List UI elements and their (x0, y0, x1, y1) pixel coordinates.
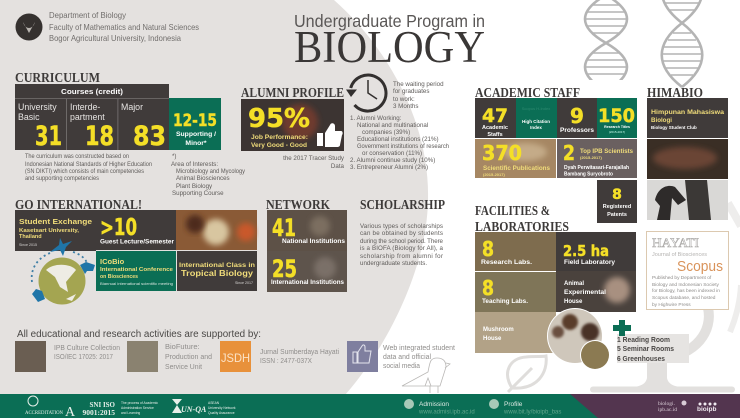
text: waiting period: 3 Months (393, 103, 418, 110)
heading: scholarship: SCHOLARSHIP (360, 197, 445, 212)
text: area of interests: *) (172, 153, 176, 160)
footer: accreditation: ACCREDITATION (25, 410, 63, 416)
text: area of interests: Microbiology and Mycology (176, 168, 246, 175)
heading: go international: GO INTERNATIONAL! (15, 197, 142, 212)
panel: academic staff grid: (2015-2017) (609, 130, 625, 134)
panel: go international grid: on Biosciences (100, 274, 138, 280)
icon: DNA helix right (662, 0, 702, 87)
panel: network: International Institutions (271, 279, 345, 286)
footer: accreditation: SNI ISO (90, 401, 116, 409)
panel: academic staff grid: Index (530, 125, 542, 130)
panel: academic staff grid: Academic (482, 125, 508, 131)
panel: courses table: Courses (credit) (61, 87, 124, 96)
panel: himabio club: Biologi (651, 117, 672, 124)
panel: facilities grid: Field Laboratory (564, 260, 616, 266)
panel: go international grid: International Class in (179, 263, 255, 269)
text: alumni breakdown: Government institutions of research (357, 143, 450, 150)
item: web integrated (347, 341, 455, 372)
header: department text: Bogor Agricultural University, Indonesia (49, 34, 181, 43)
header: department text: Faculty of Mathematics and Natural Sciences (49, 23, 199, 32)
item: IPB culture collection (15, 341, 120, 372)
panel: registered patents: Registered (603, 204, 631, 210)
photo: students in lab circle (547, 308, 610, 370)
panel: academic staff grid: Professors (560, 127, 594, 134)
text: area of interests: Area of Interests: (171, 161, 218, 168)
text: waiting period: to work: (393, 96, 415, 103)
panel: facilities grid: Mushroom (483, 327, 514, 333)
footer: social handles: ipb.ac.id (658, 407, 677, 413)
panel: facilities grid: 8 (482, 237, 494, 261)
panel: go international grid (15, 210, 257, 291)
text: waiting period: The waiting period (393, 81, 444, 88)
text: alumni breakdown: National and multinational (357, 122, 428, 129)
panel: go international grid: Thailand (19, 234, 42, 240)
panel: facilities grid: 8 (482, 276, 494, 300)
item: jurnal sumberdaya hayati (220, 341, 339, 372)
heading: himabio: HIMABIO (647, 85, 703, 100)
text: alumni breakdown (350, 115, 450, 171)
text: waiting period: for graduates (393, 88, 429, 95)
panel: hayati journal: HAYATI (652, 235, 699, 250)
panel: courses table: Major (121, 102, 143, 112)
text: alumni breakdown: 2. Alumni continue study (10%) (350, 157, 435, 164)
panel: go international grid: ICoBio (100, 257, 125, 266)
panel: supporting minor: Minor* (185, 140, 207, 147)
footer: admission link (404, 399, 475, 416)
item: IPB culture collection: ISO/IEC 17025: 2017 (54, 354, 113, 361)
panel: facilities grid: House (483, 336, 502, 342)
item: web integrated: social media (383, 363, 420, 370)
text: other facilities: 6 Greenhouses (617, 356, 665, 363)
panel: facilities grid: Animal (564, 281, 584, 287)
panel: supporting minor: 12-15 (173, 111, 217, 131)
panel: hayati journal (646, 232, 728, 310)
text: curriculum description: The curriculum was constructed based on (25, 153, 130, 160)
panel: courses table: partment (70, 112, 105, 122)
icon: green plus (613, 320, 631, 336)
panel: go international grid: >10 (100, 215, 137, 241)
text: scholarship description: undergraduate students. (360, 260, 427, 267)
icon: clock (346, 75, 386, 111)
panel: job performance: 95% (248, 104, 310, 134)
panel: hayati journal: Published by Department of (652, 275, 712, 281)
footer: accreditation: Quality Assurance (208, 411, 235, 415)
icon: university logo (16, 14, 42, 40)
text: alumni breakdown: or conservation (11%) (362, 150, 422, 157)
footer: accreditation: and Learning (121, 411, 140, 415)
panel: network: 25 (272, 255, 297, 283)
item: web integrated: data and official (383, 354, 431, 361)
panel: courses table: 18 (85, 121, 114, 152)
footer: admission link: Admission (419, 401, 449, 408)
icon: microscope watermark (593, 203, 740, 390)
panel: academic staff grid: Scopus H-Index (522, 106, 550, 111)
text: area of interests: Plant Biology (176, 183, 213, 190)
text: curriculum description: and supporting competencies (25, 175, 99, 182)
panel: go international grid: Since 2017 (235, 281, 253, 285)
text: tracer study note: the 2017 Tracer Study (283, 155, 345, 162)
footer: profile link (489, 399, 561, 416)
panel: courses table: 83 (133, 121, 166, 152)
panel: courses table: University (18, 102, 57, 112)
text: alumni breakdown: 3. Entrepreneur Alumni (2%) (350, 164, 428, 171)
panel: facilities grid: House (564, 299, 583, 305)
title: BIOLOGY (294, 22, 485, 72)
panel: hayati journal: Scopus database, and hosted (652, 295, 716, 301)
item: biofuture: BioFuture: (165, 342, 200, 351)
panel: academic staff grid: High Citation (522, 119, 550, 124)
footer: social handles: bioipb (697, 406, 717, 413)
footer: accreditation: UN-QA (181, 405, 207, 414)
panel: hayati journal: Scopus (677, 258, 723, 275)
heading: supported by: All educational and research activities are supported by: (17, 329, 261, 340)
panel: academic staff grid (475, 98, 637, 178)
panel: supporting minor: Supporting / (176, 131, 216, 138)
panel: job performance: Very Good - Good (251, 142, 307, 149)
text: scholarship description: is a BIOFA (Biology for All), a (360, 245, 444, 252)
panel: go international grid: Tropical Biology (181, 269, 254, 278)
panel: courses table (15, 84, 169, 152)
panel: network: 41 (272, 214, 296, 242)
panel: hayati journal: by Highwire Press (652, 302, 691, 308)
panel: go international grid: Student Exchange (19, 217, 92, 226)
title: Undergraduate Program in (294, 11, 485, 31)
item: biofuture: Production and (165, 352, 212, 361)
panel: go international grid: Since 2015 (19, 243, 37, 247)
panel: courses table: Interde- (70, 102, 100, 112)
panel: registered patents (597, 180, 637, 223)
footer: accreditation: A (65, 405, 76, 420)
text: tracer study note (283, 155, 345, 170)
heading: alumni profile: ALUMNI PROFILE (241, 85, 344, 100)
icon: globe with planes (32, 238, 95, 304)
heading: facilities and laboratories: LABORATORIES (475, 219, 569, 234)
panel: go international grid: International Conference (100, 267, 173, 273)
text: alumni breakdown: Educational institutions (21%) (357, 136, 439, 143)
panel: go international grid: Kasetsart University, (19, 228, 80, 234)
text: curriculum description: Indonesian National Standards of Higher Education (25, 161, 153, 168)
item: jurnal sumberdaya hayati: Jurnal Sumberdaya Hayati (260, 349, 339, 356)
footer: accreditation: The process of Academic (121, 401, 158, 405)
text: other facilities (617, 337, 674, 363)
text: scholarship description (360, 223, 444, 267)
heading: academic staff: ACADEMIC STAFF (475, 85, 580, 100)
text: waiting period (393, 81, 444, 110)
text: scholarship description: Various types of scholarships (360, 223, 443, 230)
icon: leaf watermark (508, 356, 546, 392)
item: biofuture: Service Unit (165, 362, 203, 371)
footer: admission link: www.admisi.ipb.ac.id (418, 410, 475, 416)
text: area of interests: Animal Biosciences (176, 175, 230, 182)
panel: courses table: Basic (18, 112, 40, 122)
panel: academic staff grid: Dyah Perwitasari-Farajallah (564, 165, 629, 171)
panel: hayati journal: for Biology, has been indexed in (652, 288, 720, 294)
panel: network (267, 210, 347, 292)
footer: profile link: Profile (504, 401, 523, 408)
panel: network: National Institutions (282, 238, 346, 245)
panel: academic staff grid: 370 (482, 141, 522, 165)
heading: facilities and laboratories: FACILITIES & (475, 203, 550, 218)
text: tracer study note: Data (331, 163, 345, 170)
text: scholarship description: can be obtained by students (360, 230, 443, 237)
panel: academic staff grid: 9 (570, 104, 584, 128)
text: curriculum description (25, 153, 153, 182)
panel: facilities grid: Research Labs. (481, 260, 532, 266)
panel: go international grid: Guest Lecture/Semester (100, 238, 175, 246)
panel: academic staff grid: Research Titles (604, 125, 630, 129)
item: IPB culture collection: IPB Culture Collection (54, 343, 120, 352)
panel: himabio club: Biology Student Club (651, 125, 697, 130)
panel: facilities grid (475, 232, 636, 353)
panel: job performance: Job Performance: (251, 134, 308, 141)
footer: accreditation: Administration Service (121, 406, 154, 410)
panel: facilities grid: Experimental (564, 290, 606, 296)
footer: profile link: www.bit.ly/bioipb_bas (503, 410, 561, 416)
panel: academic staff grid: Bambang Suryobroto (564, 172, 613, 178)
text: alumni breakdown: 1. Alumni Working: (350, 115, 402, 122)
panel: academic staff grid: Top IPB Scientists (580, 148, 633, 155)
panel: academic staff grid: 150 (598, 105, 635, 127)
panel: go international grid: Biannual international scientific meeting (100, 282, 173, 286)
footer: social handles (658, 400, 717, 413)
panel: supporting minor (169, 98, 221, 150)
footer: accreditation: ASEAN (208, 401, 220, 405)
footer: accreditation: 9001:2015 (82, 408, 115, 417)
grey background shape (0, 0, 428, 395)
heading: facilities and laboratories (475, 203, 569, 234)
header: department text: Department of Biology (49, 11, 127, 20)
text: other facilities: 1 Reading Room (617, 337, 670, 344)
text: area of interests (171, 153, 246, 197)
text: scholarship description: scholarship from alumni for (360, 253, 443, 260)
text: alumni breakdown: companies (39%) (362, 129, 410, 136)
panel: academic staff grid: (2015-2017) (580, 155, 602, 160)
panel: facilities grid: Teaching Labs. (482, 299, 528, 305)
footer band (0, 394, 740, 420)
icon: thumbs up (317, 123, 343, 147)
icon: DNA helix left (585, 0, 627, 91)
panel: academic staff grid: 47 (482, 105, 508, 127)
heading: curriculum: CURRICULUM (15, 70, 100, 85)
panel: job performance (241, 99, 344, 151)
panel: himabio club: Himpunan Mahasiswa (651, 109, 725, 116)
footer: accreditation (25, 396, 236, 420)
panel: himabio club (647, 98, 728, 220)
item: web integrated: Web integrated student (383, 345, 455, 352)
text: scholarship description: during the school period. There (360, 238, 444, 245)
panel: academic staff grid: Scientific Publications (483, 165, 551, 172)
item: biofuture (127, 341, 212, 372)
panel: academic staff grid: Staffs (487, 132, 503, 138)
panel: hayati journal: Biology and Indonesian Society (652, 282, 720, 288)
heading: network: NETWORK (266, 197, 330, 212)
panel: hayati journal: Journal of Biosciences (652, 252, 707, 258)
panel: registered patents: 8 (612, 187, 622, 203)
panel: facilities grid: 2.5 ha (563, 242, 609, 260)
text: area of interests: Supporting Course (172, 190, 224, 197)
text: other facilities: 5 Seminar Rooms (617, 346, 674, 353)
panel: registered patents: Patents (607, 212, 627, 218)
header: department text (49, 11, 199, 43)
footer: social handles: biologi. (658, 401, 676, 407)
icon: bird outline (402, 358, 450, 393)
item: jurnal sumberdaya hayati: ISSN : 2477-037X (260, 358, 312, 365)
panel: academic staff grid: (2015-2017) (483, 172, 505, 177)
panel: courses table: 31 (35, 121, 62, 152)
footer: accreditation: University Network (208, 406, 236, 410)
panel: academic staff grid: 2 (563, 141, 575, 165)
item: jurnal sumberdaya hayati: JSDH (221, 351, 250, 365)
text: curriculum description: (SN DIKTI) which consists of main competencies (25, 168, 144, 175)
